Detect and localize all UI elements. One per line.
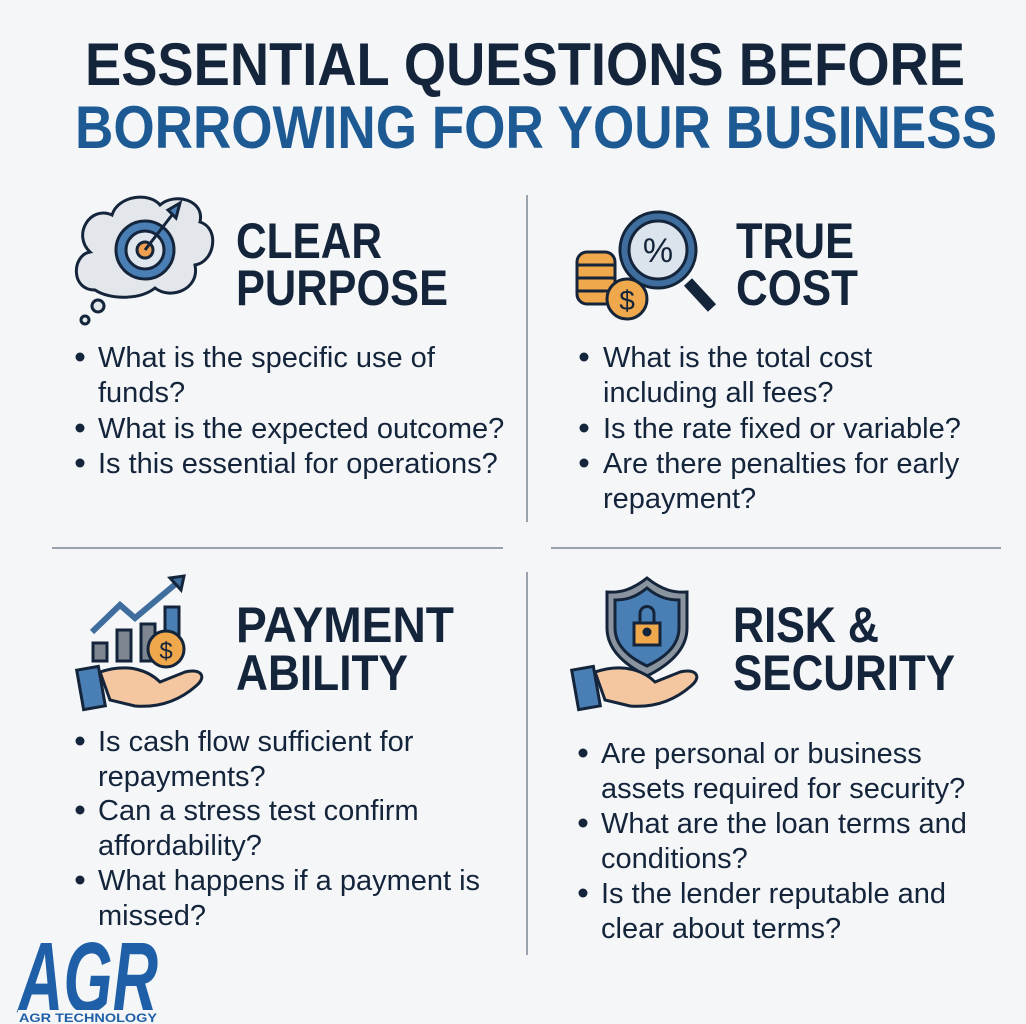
bullets: What is the total cost <box>603 342 872 374</box>
heading: PURPOSE <box>236 260 448 316</box>
icon: chart and hand <box>77 576 202 710</box>
panel: risk & security <box>572 578 967 945</box>
bullets: Is the rate fixed or variable? <box>603 413 961 445</box>
bullets: What is the expected outcome? <box>98 413 504 445</box>
bullets: Are personal or business <box>601 738 922 770</box>
heading: SECURITY <box>733 645 955 701</box>
bullets: What are the loan terms and <box>601 808 967 840</box>
bullets: repayments? <box>98 761 266 793</box>
bullets: Can a stress test confirm <box>98 795 419 827</box>
bullets: Are there penalties for early <box>603 448 960 480</box>
icon: chart and hand: $ <box>159 638 173 665</box>
bullets: including all fees? <box>603 377 834 409</box>
panel: true cost <box>577 212 961 515</box>
heading: RISK & <box>733 597 879 653</box>
bullets: conditions? <box>601 843 748 875</box>
title <box>75 31 997 161</box>
icon: coins and magnifier <box>577 212 712 319</box>
heading: ABILITY <box>236 645 408 701</box>
icon: shield and hand <box>572 578 697 710</box>
bullets: clear about terms? <box>601 913 841 945</box>
icon: coins and magnifier: % <box>643 232 673 270</box>
icon: coins and magnifier: $ <box>619 285 635 316</box>
logo: AGR Technology <box>16 922 160 1024</box>
heading <box>733 597 955 701</box>
heading <box>736 213 858 316</box>
panel: payment ability <box>76 576 480 932</box>
bullets: Is this essential for operations? <box>98 448 498 480</box>
panel: clear purpose <box>76 197 504 480</box>
bullets: repayment? <box>603 483 756 515</box>
heading: COST <box>736 260 858 316</box>
heading <box>236 213 448 316</box>
bullets: missed? <box>98 900 206 932</box>
icon: thought cloud target <box>76 197 213 324</box>
bullets: Is the lender reputable and <box>601 878 946 910</box>
bullets <box>580 342 961 515</box>
heading: PAYMENT <box>236 597 454 653</box>
bullets <box>578 738 967 945</box>
heading: TRUE <box>736 213 854 269</box>
bullets: What happens if a payment is <box>98 865 480 897</box>
bullets <box>76 726 480 932</box>
bullets <box>76 342 504 480</box>
bullets: What is the specific use of <box>98 342 436 374</box>
bullets: assets required for security? <box>601 773 965 805</box>
bullets: Is cash flow sufficient for <box>98 726 414 758</box>
bullets: funds? <box>98 377 185 409</box>
heading <box>236 597 454 701</box>
bullets: affordability? <box>98 830 262 862</box>
heading: CLEAR <box>236 213 382 269</box>
